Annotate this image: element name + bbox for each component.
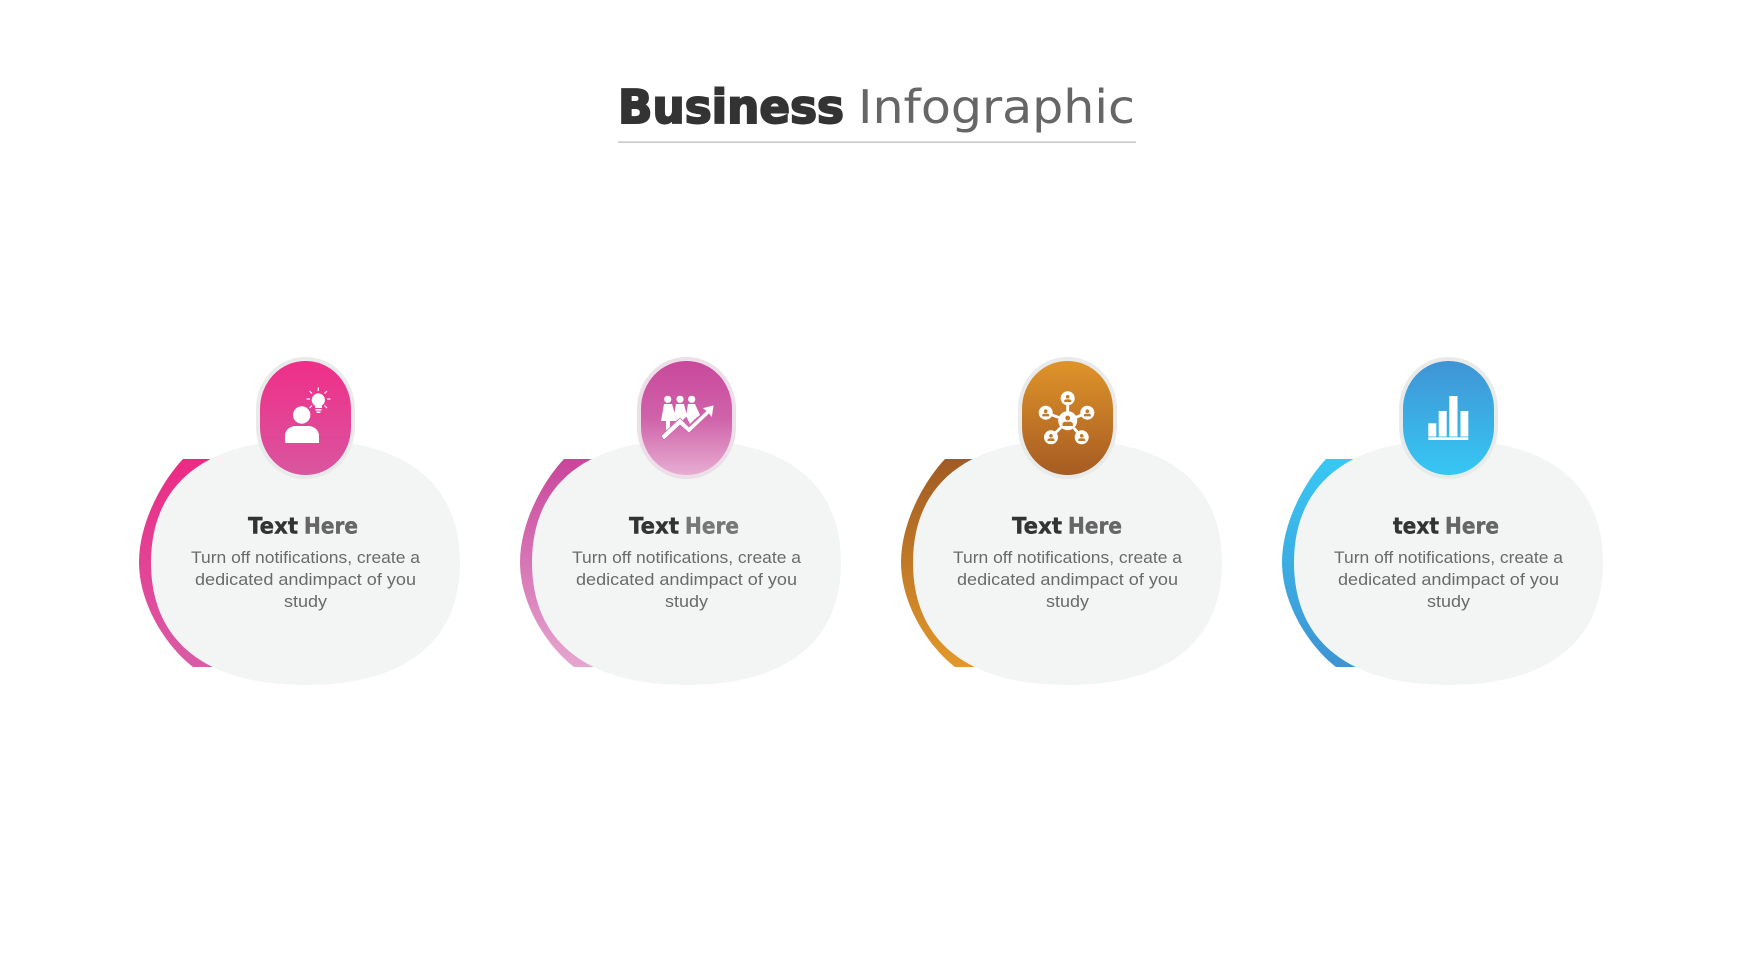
- icon: person with light bulb: [285, 388, 330, 443]
- body text 3: dedicated andimpact of you: [957, 570, 1178, 589]
- body text 2: study: [665, 592, 709, 611]
- heading 3: Text: [1012, 514, 1062, 540]
- body text 3: study: [1046, 592, 1090, 611]
- panel: card 3: [901, 359, 1222, 685]
- icon: people network: [1039, 391, 1094, 444]
- title: [618, 80, 1135, 134]
- icon: bar chart: [1428, 396, 1468, 440]
- title: Infographic: [858, 80, 1135, 134]
- body text 4: [1334, 548, 1564, 611]
- heading 3: Here: [1068, 514, 1122, 540]
- body text 4: study: [1427, 592, 1471, 611]
- heading 4: text: [1393, 514, 1439, 540]
- accent arc 2: [520, 459, 641, 667]
- body text 4: Turn off notifications, create a: [1334, 548, 1564, 567]
- accent arc 3: [901, 459, 1022, 667]
- body text 1: dedicated andimpact of you: [195, 570, 416, 589]
- card body 4: [1294, 440, 1603, 685]
- body text 3: [953, 548, 1183, 611]
- body text 2: Turn off notifications, create a: [572, 548, 802, 567]
- body text 2: dedicated andimpact of you: [576, 570, 797, 589]
- body text 4: dedicated andimpact of you: [1338, 570, 1559, 589]
- heading 1: Text: [248, 514, 298, 540]
- heading 4: Here: [1445, 514, 1499, 540]
- icon badge 4: [1401, 359, 1496, 477]
- card body 2: [532, 440, 841, 685]
- icon badge 2: [639, 359, 734, 477]
- card body 3: [913, 440, 1222, 685]
- heading 2: Text: [629, 514, 679, 540]
- accent arc 4: [1282, 459, 1403, 667]
- title: Business: [618, 80, 844, 134]
- panel: card 1: [139, 359, 460, 685]
- heading 1: Here: [304, 514, 358, 540]
- body text 2: [572, 548, 802, 611]
- heading 2: Here: [685, 514, 739, 540]
- icon badge 1: [258, 359, 353, 477]
- icon: team with rising arrow: [661, 396, 714, 440]
- body text 1: Turn off notifications, create a: [191, 548, 421, 567]
- panel: card 4: [1282, 359, 1603, 685]
- panel: card 2: [520, 359, 841, 685]
- body text 1: study: [284, 592, 328, 611]
- accent arc 1: [139, 459, 260, 667]
- icon badge 3: [1020, 359, 1115, 477]
- card body 1: [151, 440, 460, 685]
- body text 1: [191, 548, 421, 611]
- body text 3: Turn off notifications, create a: [953, 548, 1183, 567]
